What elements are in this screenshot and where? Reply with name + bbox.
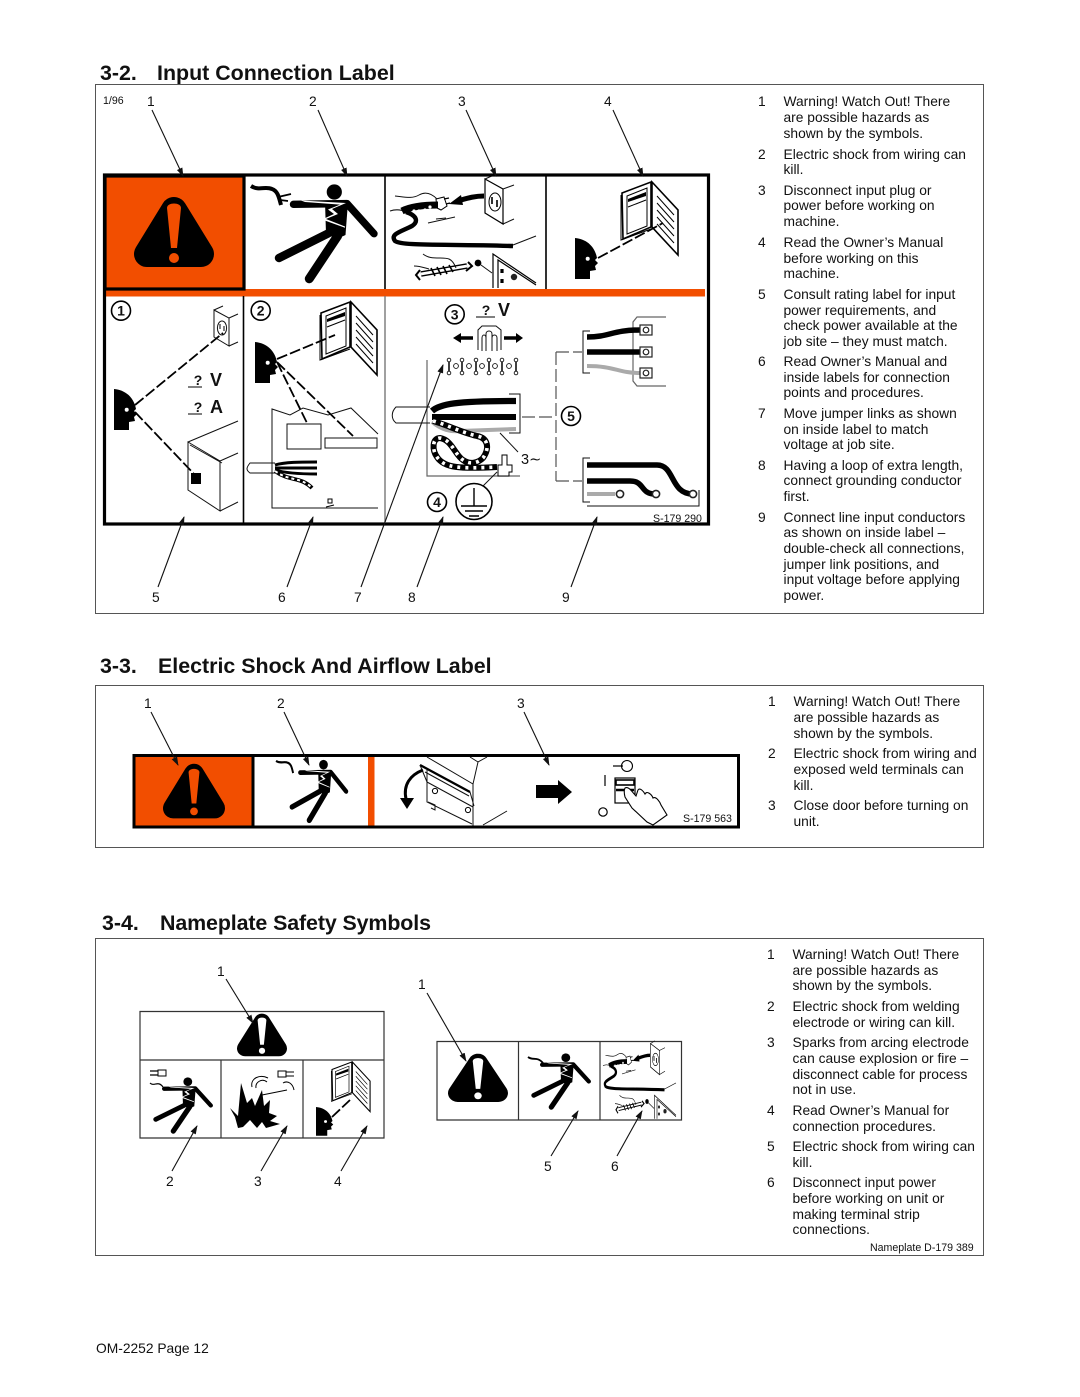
key list: nameplate: making terminal strip [792, 1207, 920, 1222]
key list: input connection: job site – they must match. [782, 334, 948, 349]
explosion and sparks icon [230, 1071, 294, 1128]
electric shock icon [528, 1053, 589, 1107]
step 1 consult rating label: 1 [117, 303, 125, 319]
key list: input connection: power before working on [784, 198, 935, 213]
key list: nameplate: 4 [767, 1103, 775, 1118]
step 1 consult rating label [112, 301, 238, 511]
key list: input connection: 1 [758, 94, 766, 109]
callout numbers and arrows: input connection: 5 [152, 590, 160, 605]
electric shock from electrode icon [150, 1070, 211, 1131]
read manual icon [316, 1062, 370, 1136]
orange warning cell [135, 756, 253, 827]
callout numbers and arrows: nameplate: 3 [254, 1174, 262, 1189]
key list: shock and airflow: unit. [794, 814, 820, 829]
warning triangle icon [458, 1058, 498, 1099]
callout numbers and arrows: input connection: 4 [604, 94, 612, 109]
key list: nameplate [767, 947, 975, 1237]
key list: input connection: 8 [758, 458, 766, 473]
key list: input connection: Disconnect input plug or [784, 183, 932, 198]
section 3-3 heading: Electric Shock And Airflow Label [158, 654, 492, 678]
key list: input connection: first. [784, 489, 810, 504]
step 3 jumper links: V [498, 300, 510, 320]
key list: input connection: are possible hazards as [784, 110, 929, 125]
callout numbers and arrows: nameplate: 4 [334, 1174, 342, 1189]
key list: input connection: voltage at job site. [784, 437, 895, 452]
key list: nameplate: 6 [767, 1175, 775, 1190]
key list: nameplate: can cause explosion or fire – [792, 1051, 968, 1066]
key list: input connection: check power available at the [784, 318, 958, 333]
step 1 consult rating label: V [210, 370, 222, 390]
key list: nameplate: not in use. [792, 1082, 856, 1097]
orange stripe [368, 756, 374, 827]
key list: nameplate: electrode or wiring can kill. [792, 1015, 955, 1030]
electric shock icon [276, 760, 346, 820]
step 5 line input connections [509, 317, 699, 506]
step 4 ground conductor: 4 [433, 494, 441, 510]
warning triangle icon [173, 769, 215, 815]
key list: input connection: before working on this [784, 251, 919, 266]
section 3-2 heading: 3-2. [100, 61, 137, 85]
key list: input connection: 6 [758, 354, 766, 369]
key list: input connection: Consult rating label for input [784, 287, 955, 302]
key list: shock and airflow: shown by the symbols. [794, 726, 933, 741]
key list: input connection: Read Owner’s Manual and [784, 354, 947, 369]
key list: nameplate: Electric shock from wiring can [792, 1139, 975, 1154]
step 4 ground conductor: 3∼ [521, 452, 541, 468]
key list: input connection: machine. [784, 214, 839, 229]
callout numbers and arrows: nameplate: 2 [166, 1174, 174, 1189]
callout numbers and arrows: input connection: 6 [278, 590, 286, 605]
key list: shock and airflow: Electric shock from wiring and [794, 746, 977, 761]
key list: input connection: connect grounding conductor [784, 473, 962, 488]
key list: input connection: shown by the symbols. [784, 126, 923, 141]
key list: input connection: Having a loop of extra length, [784, 458, 963, 473]
key list: nameplate: Disconnect input power [792, 1175, 936, 1190]
key list: input connection: 4 [758, 235, 766, 250]
callout numbers and arrows: input connection: 3 [458, 94, 466, 109]
part number S-179 290: S-179 290 [653, 513, 702, 525]
key list: input connection: Move jumper links as shown [784, 406, 957, 421]
step 1 consult rating label: ? [194, 372, 202, 388]
key list: nameplate: disconnect cable for process [792, 1067, 967, 1082]
step 2 read manual and inside labels: 2 [257, 303, 265, 319]
callout numbers and arrows: input connection: 9 [562, 590, 570, 605]
part number S-179 563: S-179 563 [683, 813, 732, 825]
callout numbers and arrows: input connection: 1 [147, 94, 155, 109]
callout numbers and arrows: input connection: 2 [309, 94, 317, 109]
step 3 jumper links: 3 [451, 306, 459, 322]
callout numbers and arrows: nameplate: 1 [418, 977, 426, 992]
callout numbers and arrows: nameplate: 5 [544, 1159, 552, 1174]
orange divider band [105, 289, 705, 296]
callout numbers and arrows: nameplate: 1 [217, 964, 225, 979]
step 5 line input connections: 5 [567, 408, 575, 424]
callout numbers and arrows: nameplate [166, 964, 642, 1189]
step 1 consult rating label: ? [194, 399, 202, 415]
step 3 jumper links: ? [482, 302, 490, 318]
date code: 1/96 [103, 95, 124, 107]
warning triangle icon [147, 204, 201, 263]
callout numbers and arrows: input connection [147, 94, 643, 605]
key list: nameplate: shown by the symbols. [792, 978, 932, 993]
key list: input connection: Warning! Watch Out! There [784, 94, 950, 109]
key list: input connection [758, 94, 966, 603]
right nameplate symbols [437, 1041, 682, 1120]
key list: input connection: 2 [758, 147, 766, 162]
key list: nameplate: kill. [792, 1155, 812, 1170]
key list: input connection: 3 [758, 183, 766, 198]
key list: nameplate: are possible hazards as [792, 963, 938, 978]
section 3-2 heading: Input Connection Label [157, 61, 395, 85]
section 3-4 heading: 3-4. [102, 911, 139, 935]
panel: electric shock and airflow label [96, 686, 984, 848]
key list: shock and airflow: exposed weld terminals can [794, 762, 964, 777]
key list: nameplate: before working on unit or [792, 1191, 945, 1206]
left nameplate symbols [140, 1012, 384, 1138]
key list: input connection: input voltage before applying [784, 572, 960, 587]
key list: nameplate: 5 [767, 1139, 775, 1154]
electric shock icon [251, 184, 374, 279]
key list: input connection: Read the Owner’s Manual [784, 235, 943, 250]
key list: shock and airflow: kill. [794, 778, 813, 793]
label outer frame and cell dividers [104, 175, 708, 524]
key list: nameplate: Sparks from arcing electrode [792, 1035, 969, 1050]
big right arrow [536, 780, 572, 804]
key list: input connection: on inside label to match [784, 422, 928, 437]
label artwork: shock and airflow [134, 756, 738, 827]
key list: input connection: points and procedures. [784, 385, 924, 400]
key list: shock and airflow: Warning! Watch Out! There [794, 694, 960, 709]
key list: input connection: 7 [758, 406, 766, 421]
warning triangle icon [245, 1018, 279, 1054]
key list: input connection: 5 [758, 287, 766, 302]
nameplate part number: Nameplate D-179 389 [870, 1242, 974, 1254]
key list: input connection: Electric shock from wiring can [784, 147, 966, 162]
key list: input connection: double-check all connections, [784, 541, 965, 556]
callout numbers and arrows: shock and airflow: 2 [277, 696, 285, 711]
key list: nameplate: Warning! Watch Out! There [792, 947, 959, 962]
read manual icon [575, 182, 678, 279]
key list: nameplate: Read Owner’s Manual for [792, 1103, 950, 1118]
disconnect plug icon [390, 175, 536, 288]
page footer: OM-2252 Page 12 [96, 1341, 209, 1356]
key list: input connection: power requirements, and [784, 303, 936, 318]
step 2 read manual and inside labels [247, 301, 378, 508]
key list: input connection: kill. [784, 162, 803, 177]
key list: shock and airflow: Close door before turning on [794, 798, 968, 813]
disconnect plug icon [603, 1041, 676, 1119]
key list: input connection: jumper link positions, and [782, 557, 939, 572]
key list: nameplate: connections. [792, 1222, 870, 1237]
key list: nameplate: 1 [767, 947, 775, 962]
switch hand and voltage symbol [599, 760, 667, 825]
key list: input connection: Connect line input conductors [784, 510, 965, 525]
key list: nameplate: 2 [767, 999, 775, 1014]
panel: nameplate safety symbols [96, 938, 984, 1256]
key list: input connection: machine. [784, 266, 839, 281]
step 1 consult rating label: A [210, 397, 223, 417]
key list: shock and airflow: 1 [768, 694, 776, 709]
callout numbers and arrows: nameplate: 6 [611, 1159, 619, 1174]
key list: shock and airflow [768, 694, 977, 829]
label outer frame [134, 756, 738, 827]
callout numbers and arrows: input connection: 8 [408, 590, 416, 605]
section 3-3 heading: 3-3. [100, 654, 137, 678]
key list: nameplate: Electric shock from welding [792, 999, 960, 1014]
key list: shock and airflow: are possible hazards as [794, 710, 939, 725]
callout numbers and arrows: input connection: 7 [354, 590, 362, 605]
key list: shock and airflow: 3 [768, 798, 776, 813]
orange warning cell [105, 176, 244, 289]
section 3-4 heading: Nameplate Safety Symbols [160, 911, 431, 935]
key list: input connection: inside labels for connection [784, 370, 950, 385]
key list: nameplate: 3 [767, 1035, 775, 1050]
key list: nameplate: connection procedures. [792, 1119, 936, 1134]
key list: input connection: as shown on inside label – [784, 525, 946, 540]
callout numbers and arrows: shock and airflow: 1 [144, 696, 152, 711]
label artwork: input connection [104, 175, 708, 525]
open door with curved arrow [400, 757, 507, 826]
key list: input connection: 9 [758, 510, 766, 525]
callout numbers and arrows: shock and airflow: 3 [517, 696, 525, 711]
step 3 jumper links [445, 300, 523, 375]
key list: input connection: power. [784, 588, 824, 603]
key list: shock and airflow: 2 [768, 746, 776, 761]
panel: input connection label [96, 84, 984, 1356]
step 4 ground conductor [392, 360, 541, 520]
callout numbers and arrows: shock and airflow [144, 696, 549, 765]
